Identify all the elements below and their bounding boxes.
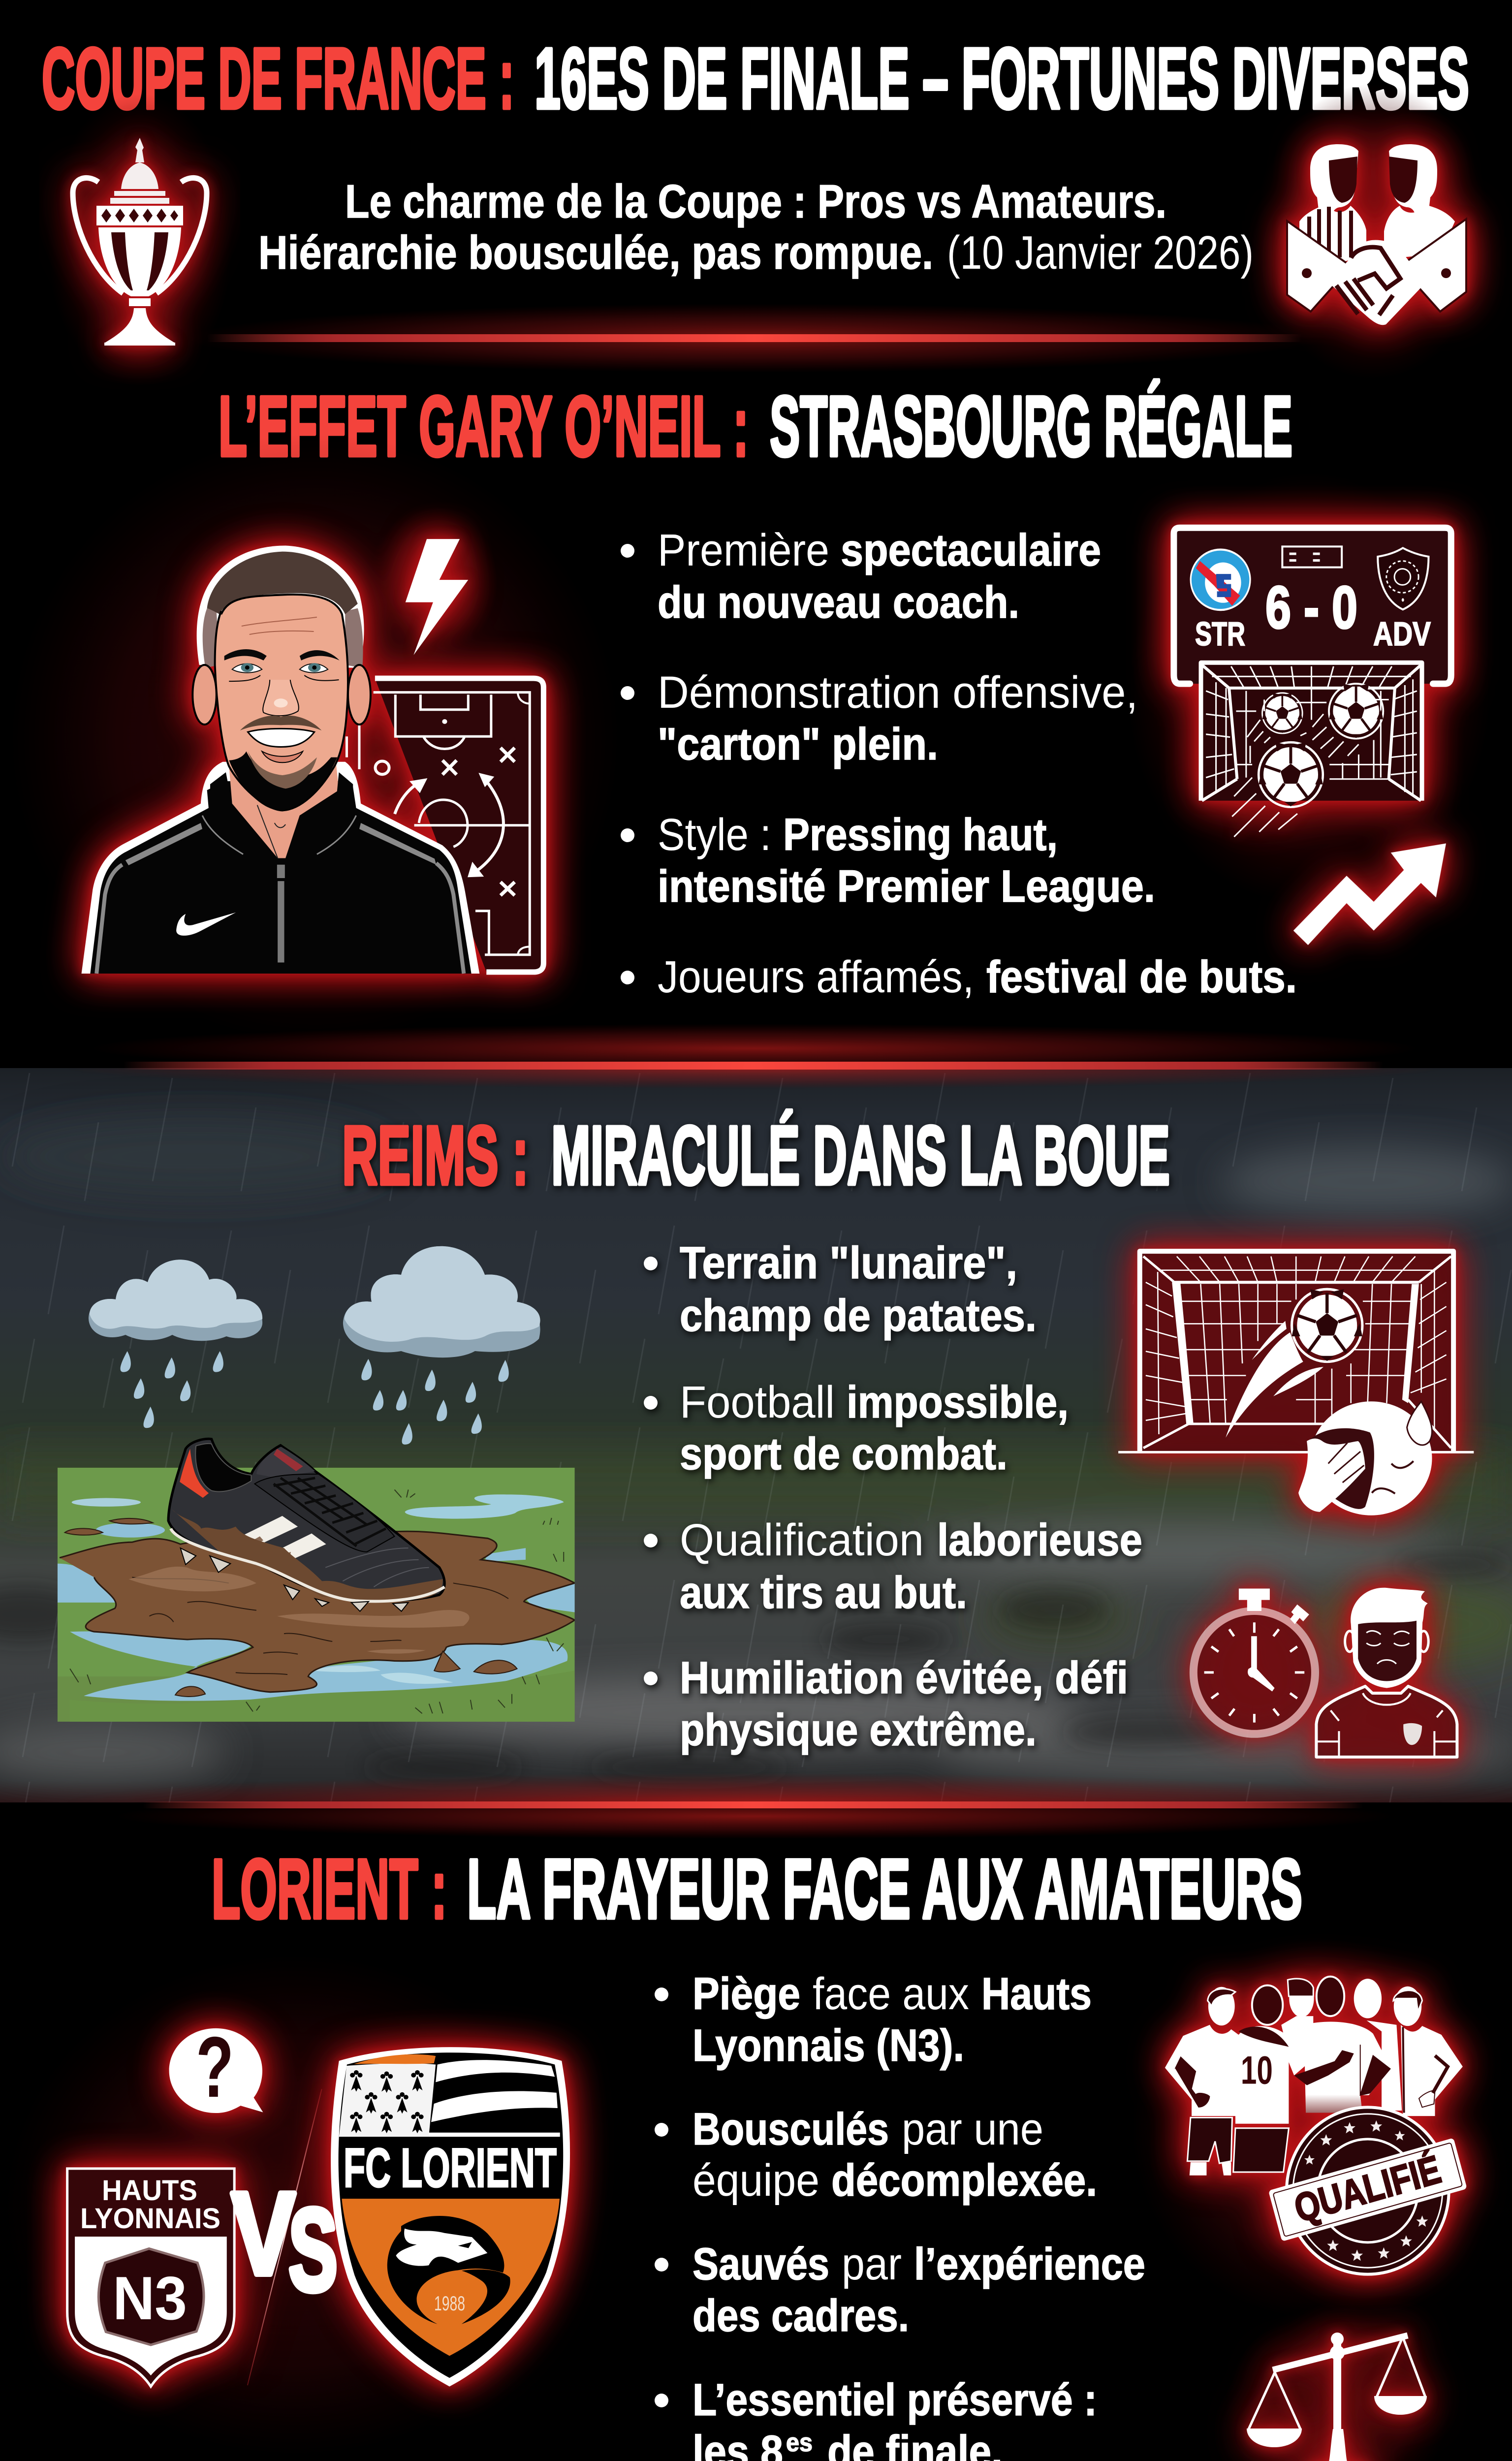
icon: scales	[1224, 2303, 1450, 2461]
heading: Lorient	[212, 1842, 1302, 1936]
icon: stopwatch and tired player	[1194, 1588, 1457, 1757]
divider	[115, 1794, 1394, 1839]
centre player: 10	[1241, 2048, 1273, 2092]
bullet 2: Bousculés	[693, 2104, 889, 2154]
bullet 3	[655, 2239, 1145, 2341]
player	[1316, 1588, 1457, 1757]
bullet 2: équipe	[693, 2155, 819, 2206]
divider	[189, 304, 1321, 373]
grass card	[58, 1468, 575, 1723]
coach	[82, 545, 479, 974]
bullet 2: par une	[902, 2104, 1043, 2154]
goal	[1201, 663, 1422, 801]
score labels: ADV	[1373, 615, 1431, 653]
icon: handshake	[1255, 84, 1491, 379]
face	[1310, 1401, 1432, 1515]
bullet 4: Joueurs affamés,	[658, 952, 974, 1002]
bullet 1: Lyonnais (N3).	[693, 2020, 964, 2071]
bullet 3	[621, 810, 1155, 912]
bullet 2	[644, 1377, 1069, 1479]
subtitle	[258, 175, 1254, 279]
bullet 1: Terrain "lunaire",	[680, 1238, 1017, 1288]
heading: Lorient: LORIENT :	[212, 1842, 447, 1936]
mud	[60, 1531, 575, 1692]
boot	[168, 1439, 444, 1611]
bullet 1: spectaculaire	[841, 525, 1101, 575]
number 10 player	[1221, 1986, 1307, 2172]
bullets: Reims	[644, 1238, 1142, 1755]
bullet 4: L’essentiel préservé :	[693, 2375, 1097, 2425]
bullet 1	[621, 525, 1101, 628]
bullet 3: intensité Premier League.	[658, 861, 1155, 912]
bullet 2: sport de combat.	[680, 1429, 1008, 1479]
bullet 3: laborieuse	[937, 1515, 1142, 1565]
bullet 2: impossible,	[847, 1377, 1069, 1427]
text on badges: S	[288, 2185, 338, 2315]
N3 shield	[67, 2169, 234, 2387]
slash	[248, 2089, 322, 2385]
bullet 3: par	[842, 2239, 902, 2289]
illustration: Hauts Lyonnais vs FC Lorient	[5, 1954, 586, 2456]
stamp: QUALIFIÉ	[1290, 2147, 1445, 2231]
bullet 1	[655, 1969, 1092, 2071]
bullet 4: festival de buts.	[986, 952, 1297, 1002]
growth arrow	[1293, 844, 1446, 945]
bullet 3: Pressing haut,	[783, 810, 1058, 860]
text on badges: HAUTS	[102, 2175, 197, 2207]
bullet 2: Démonstration offensive,	[658, 667, 1138, 718]
stamp	[1268, 2107, 1467, 2274]
text on badges: ?	[196, 2019, 234, 2115]
bullet 1	[644, 1238, 1037, 1341]
text on badges	[80, 2019, 557, 2333]
bullet 2: "carton" plein.	[658, 719, 938, 769]
heading: Reims: REIMS :	[342, 1109, 529, 1202]
icon: rain clouds	[89, 1246, 540, 1445]
bullets: Strasbourg	[621, 525, 1297, 1002]
bullet 3: l’expérience	[914, 2239, 1145, 2289]
FC Lorient crest	[331, 2047, 570, 2387]
cloud right	[343, 1246, 540, 1357]
text on badges: 1988	[434, 2292, 465, 2315]
bullet 1: Première	[658, 525, 829, 575]
question bubble	[169, 2028, 263, 2113]
subtitle: Le charme de la Coupe : Pros vs Amateurs.	[345, 175, 1166, 228]
icon: scoreboard and goal	[1127, 473, 1491, 945]
rain drops	[121, 1351, 509, 1445]
bullet 3: Style :	[658, 810, 771, 860]
bullet 2: Football	[680, 1377, 835, 1427]
puddles	[58, 1494, 575, 1701]
bullets: Lorient	[655, 1969, 1145, 2461]
bullet 1: Hauts	[981, 1969, 1092, 2019]
icon: goal and sweating goalkeeper face	[1118, 1251, 1474, 1515]
bullet 3: des cadres.	[693, 2291, 909, 2341]
bullet 1: champ de patates.	[680, 1291, 1037, 1341]
icon: lightning	[406, 539, 468, 655]
back players	[1281, 1977, 1463, 2116]
bullet 4: es	[786, 2429, 813, 2457]
tactics board	[346, 678, 543, 972]
bullet 2	[621, 667, 1138, 769]
title: COUPE DE FRANCE :	[42, 31, 514, 127]
cloud left	[89, 1260, 262, 1341]
illustration: boot in the mud	[58, 1439, 575, 1723]
bullet 1: face aux	[813, 1969, 969, 2019]
icon: team and qualified stamp	[1132, 1934, 1496, 2318]
centre player	[1241, 2021, 1390, 2113]
bullet 2: décomplexée.	[831, 2155, 1097, 2206]
stars plate	[1282, 546, 1342, 568]
bullet 2	[655, 2104, 1097, 2206]
heading: Reims	[342, 1109, 1170, 1202]
scoreboard frame	[1174, 528, 1451, 684]
text on badges: LYONNAIS	[80, 2203, 220, 2235]
bullet 4: Humiliation évitée, défi	[680, 1653, 1128, 1703]
bullet 4	[621, 952, 1297, 1002]
bullet 3: aux tirs au but.	[680, 1568, 967, 1618]
score labels	[1195, 574, 1431, 653]
bullet 4: physique extrême.	[680, 1705, 1037, 1755]
bullet 3: Sauvés	[693, 2239, 829, 2289]
bullet 4	[644, 1653, 1128, 1755]
title	[42, 31, 1469, 127]
divider	[90, 1024, 1419, 1073]
subtitle: Hiérarchie bousculée, pas rompue.	[258, 226, 933, 279]
bullet 1: du nouveau coach.	[658, 577, 1019, 628]
text on badges: V	[231, 2169, 295, 2299]
subtitle: (10 Janvier 2026)	[947, 226, 1254, 279]
opponent badge	[1378, 548, 1428, 609]
score labels: 6 - 0	[1265, 574, 1357, 641]
score labels: STR	[1195, 615, 1245, 653]
panel: Reims background	[0, 1047, 1512, 1832]
bullet 3	[644, 1515, 1142, 1618]
bullet 3: Qualification	[680, 1515, 924, 1565]
Strasbourg badge	[1190, 549, 1251, 611]
stopwatch	[1194, 1588, 1315, 1734]
icon: trophy	[46, 94, 233, 389]
text on badges: N3	[113, 2265, 187, 2333]
bullet 1: Piège	[693, 1969, 800, 2019]
bullet 4	[655, 2375, 1097, 2461]
heading: Strasbourg: L’EFFET GARY O’NEIL :	[219, 378, 749, 474]
text on badges: FC LORIENT	[344, 2137, 557, 2199]
illustration: coach, lightning and tactics board	[10, 433, 620, 1043]
left player	[1165, 1987, 1238, 2176]
